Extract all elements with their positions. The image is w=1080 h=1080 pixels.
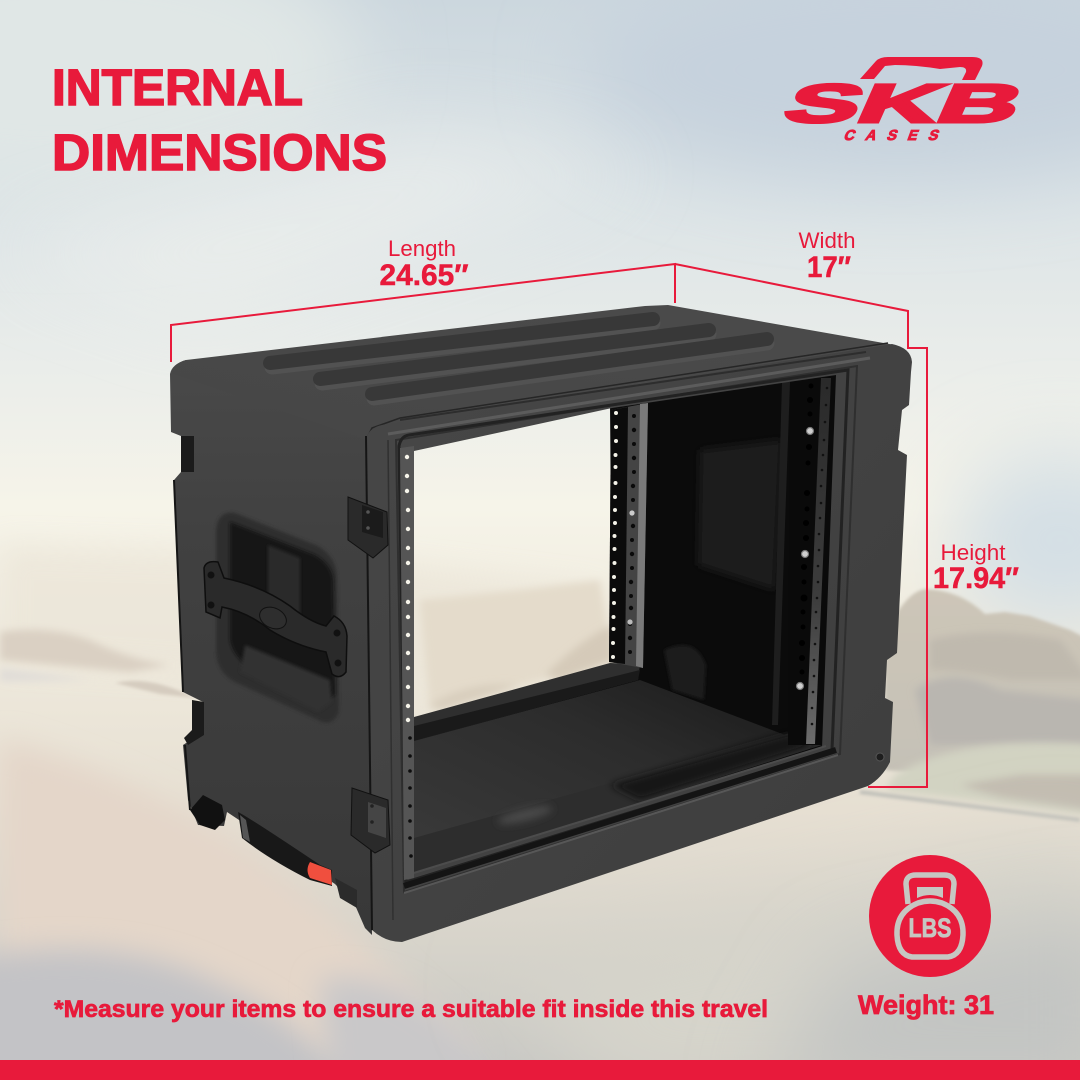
- product: rack case: [170, 305, 912, 942]
- rear left rack rail: [609, 403, 648, 668]
- red latch: [308, 862, 332, 885]
- weight label: Weight: 31: [858, 990, 994, 1020]
- left side handle recess: [216, 513, 339, 723]
- weight icon: kettlebell: [869, 855, 991, 977]
- lower latch: [351, 788, 390, 853]
- logo: SKB Cases: SKB: [775, 73, 1034, 133]
- upper latch: [348, 497, 388, 558]
- title: INTERNAL: [52, 59, 303, 116]
- side carry handle: [204, 562, 347, 677]
- logo: SKB Cases: CASES: [842, 127, 942, 144]
- frame recess ridges: [366, 352, 870, 930]
- label: length: 24.65″: [380, 259, 468, 292]
- frame screw: [876, 753, 884, 761]
- label: length: Length: [388, 236, 456, 261]
- bottom bar: [0, 1060, 1080, 1080]
- left side face: [170, 360, 372, 935]
- footnote: *Measure your items to ensure a suitable fit inside this travel: [54, 996, 768, 1023]
- label: width: Width: [798, 228, 856, 253]
- right rack rail: [772, 376, 838, 745]
- case interior: [405, 368, 850, 885]
- label: height: Height: [940, 540, 1006, 565]
- label: width: 17″: [807, 251, 851, 284]
- title: [52, 59, 387, 181]
- top ribs: [270, 319, 767, 398]
- title: DIMENSIONS: [52, 124, 387, 181]
- logo: SKB Cases: [775, 57, 1034, 144]
- top face: [172, 305, 895, 440]
- label: height: 17.94″: [933, 562, 1019, 595]
- weight icon: kettlebell: LBS: [908, 913, 952, 943]
- bottom wheel and handle bar: [190, 795, 357, 908]
- front frame: [366, 344, 912, 942]
- label: height: [933, 540, 1019, 595]
- front left rack rail: [400, 446, 414, 880]
- label: width: [798, 228, 856, 284]
- label: length: [380, 236, 468, 292]
- dimension lines: [171, 264, 927, 787]
